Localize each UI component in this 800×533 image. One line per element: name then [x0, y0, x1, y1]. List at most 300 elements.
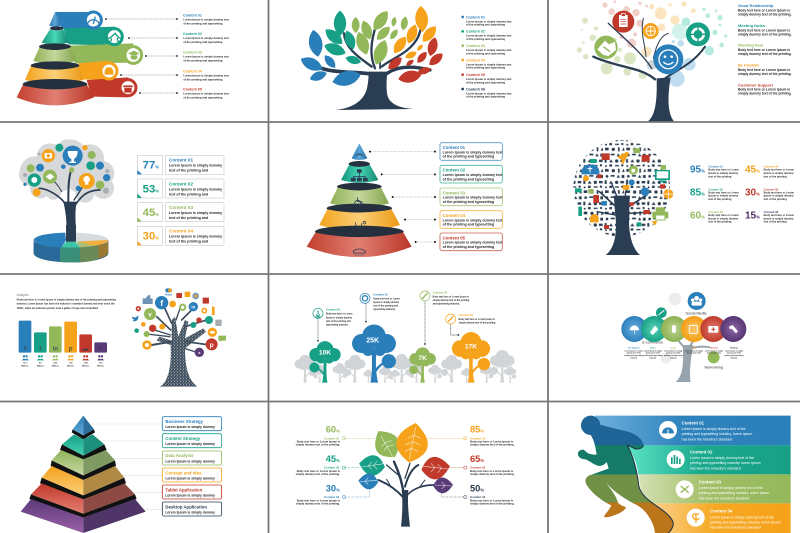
cone tiers — [307, 143, 412, 257]
circle captions: dummy text of the — [627, 352, 641, 355]
six main circles — [621, 316, 746, 342]
coloured icons — [575, 148, 673, 229]
cone ribbon icons — [85, 12, 142, 96]
callout 01: Ipsum is simply dummy — [326, 317, 353, 319]
label box: Content Strategy — [162, 434, 222, 448]
bar legend: people icons and values: Millions — [37, 366, 44, 368]
label box: Tablet Application: Tablet Application — [165, 487, 203, 492]
label box: Business Strategy: Lorem Ipsum is simply dummy — [165, 425, 215, 429]
panel: social media circle tree — [621, 292, 746, 382]
bar legend: people icons and values: Millions — [21, 366, 29, 368]
circle captions: Audio — [671, 347, 677, 350]
analysis text: industry. Lorem Ipsum has been the industry's standard dummy text ever since the — [17, 303, 115, 306]
circle captions: printing and typesetting — [725, 354, 743, 357]
circle captions: dummy text of the — [687, 352, 701, 355]
callout 03 — [420, 290, 470, 345]
panel: forest statistics — [295, 290, 516, 383]
bar legend: people icons and values: Millions — [67, 366, 74, 368]
cone content list — [183, 13, 229, 100]
cone tier icons — [351, 154, 367, 255]
stat 85 — [464, 425, 515, 447]
content box 01 — [440, 143, 503, 160]
content box 04 — [440, 211, 503, 228]
band 01 content: printing and typesetting industry. lorem Ipsum — [682, 432, 752, 436]
tree 10K: 10K — [319, 350, 331, 357]
content box 02: Lorem Ipsum is simply dummy text — [443, 173, 503, 177]
callout 03: and typesetting industry. — [433, 303, 460, 306]
speckled tree — [147, 305, 210, 387]
panel: bubble tree — [577, 0, 792, 122]
bubble tree text list: simply dummy text of the printing. — [738, 13, 792, 17]
bubble tree text list: simply dummy text of the printing. — [738, 92, 792, 96]
cone content list: Content 04 — [183, 69, 203, 73]
bar chart: in — [53, 346, 58, 352]
cone content list: Lorem Ipsum is simply dummy text — [183, 17, 229, 21]
stat 60: 60% — [690, 210, 705, 221]
crown of small icons — [573, 140, 670, 237]
tree 7K: 7K — [418, 355, 427, 362]
leaves: red — [386, 36, 445, 85]
band 01 content — [659, 420, 752, 441]
stat 85: Ipsum is simply dummy — [708, 194, 739, 198]
band 03 content: printing and typesetting industry. lorem Ipsum — [699, 491, 769, 495]
pie chart base — [34, 233, 108, 262]
stat 30: Ipsum is simply dummy — [764, 194, 794, 198]
stat 60: Ipsum is simply dummy — [708, 216, 739, 220]
content box 03: of the printing and typesetting — [443, 200, 494, 204]
social icon bubbles: s — [198, 350, 201, 355]
cone leader lines — [105, 18, 178, 94]
band 03 content — [676, 479, 769, 500]
callout 03: Content 03 — [433, 290, 448, 294]
pale circles — [661, 293, 681, 364]
stat 85: 85% — [690, 188, 705, 199]
social icon bubbles: flickr — [165, 293, 173, 297]
leaf tree content list: Lorem Ipsum is simply dummy text — [466, 48, 512, 52]
callout 04: Content 04 — [459, 313, 474, 317]
panel: runner with content bands — [578, 416, 791, 533]
band 04 content: Content 04 — [710, 508, 733, 513]
panel: colourful leaf tree — [298, 5, 512, 110]
tree trunk — [597, 180, 648, 255]
leaves: orange — [390, 5, 439, 60]
content box 02: Content 02 — [443, 168, 466, 173]
content box 03: Content 03 — [443, 190, 466, 195]
label box: Tablet Application — [162, 485, 222, 499]
analysis text: Analysis — [17, 293, 29, 297]
tree trunk and branches — [322, 20, 430, 110]
stat 85: Body text here or Lorem Ipsum is — [470, 440, 514, 444]
callout 04 — [446, 313, 496, 336]
content box 05 — [440, 233, 503, 251]
stat 65: Content 01 — [470, 466, 486, 470]
label box: Business Strategy: Business Strategy — [165, 419, 204, 424]
cone content list: Lorem Ipsum is simply dummy text — [183, 55, 229, 59]
content box 04: Lorem Ipsum is simply dummy text — [443, 218, 503, 222]
bubble tree text list: Good Relationship — [738, 3, 774, 8]
circle captions: Home — [650, 348, 657, 350]
circle captions: industry. — [670, 356, 677, 359]
stat 45: simply dummy text of the printing. — [296, 472, 340, 476]
circle captions: printing and typesetting — [664, 354, 683, 357]
band 02 content — [667, 449, 761, 470]
icon: balance bubble — [643, 23, 659, 39]
leader lines — [344, 438, 465, 497]
leaf tree content list: Lorem Ipsum is simply dummy text — [466, 34, 512, 38]
content box 05: Lorem Ipsum is simply dummy text — [443, 241, 503, 245]
stat 60: 60% — [326, 425, 340, 435]
bubble tree text list: Working Fast — [738, 43, 764, 48]
cone content list: of the printing and typesetting — [183, 21, 223, 25]
bubble tree text list: Body text here or Lorem Ipsum is — [738, 28, 790, 32]
leaf tree content list: Content 01 — [466, 15, 485, 19]
bar legend: people icons and values: 1.35 — [69, 363, 73, 365]
stat 45: Content 04 — [764, 165, 779, 169]
content box 03 — [440, 188, 503, 206]
circle captions: dummy text of the — [727, 352, 741, 355]
bubble tree text list: simply dummy text of the printing. — [738, 72, 792, 76]
bubble tree text list: simply dummy text of the printing. — [738, 52, 792, 56]
cone content list: Content 05 — [183, 88, 202, 92]
bar legend: people icons and values: 2.75 — [99, 363, 103, 365]
cone content list: Content 01 — [183, 13, 202, 17]
stat 45: Body text here or Lorem Ipsum is — [297, 469, 340, 473]
tree trunk and branches — [378, 462, 433, 527]
stat 85: 85% — [470, 425, 484, 435]
panel: six leaf tree with percentages — [296, 420, 515, 527]
band 02 content: has been the industry's standard — [690, 466, 741, 470]
tree 10K — [309, 341, 341, 383]
callout 02: typesetting industry. — [373, 308, 396, 311]
percentage box 53: text of the printing and — [169, 192, 208, 196]
band 01 content: Content 01 — [682, 420, 705, 425]
circle captions: Lorem Ipsum is simply — [664, 350, 682, 352]
percentage box 77: 77% — [143, 160, 159, 172]
stat 30: Body text here or Lorem Ipsum is — [297, 498, 340, 502]
stat 65: 65% — [470, 454, 484, 464]
content box 01: Content 01 — [443, 145, 466, 150]
percentage box 45: text of the printing and — [169, 216, 208, 220]
bar legend: people icons and values: Millions — [97, 366, 104, 368]
stat 85: text of the printing — [708, 197, 732, 201]
bubble tree text list: Body text here or Lorem Ipsum is — [738, 48, 790, 52]
circle captions: Medical — [710, 348, 718, 350]
stat 85: simply dummy text of the printing. — [470, 443, 515, 447]
cone content list: of the printing and typesetting — [183, 77, 223, 81]
tree trunk and branches — [39, 168, 100, 241]
icon: handshake bubble — [594, 36, 618, 59]
content box 01: Lorem Ipsum is simply dummy text — [443, 150, 503, 154]
callout 02: Content 02 — [373, 293, 388, 297]
stat 65: Body text here or Lorem Ipsum is — [470, 469, 514, 473]
callout 01: text of the printing and — [326, 320, 351, 323]
stat 30: Content 05 — [764, 187, 779, 191]
stat 45 — [296, 454, 346, 476]
leader lines — [91, 424, 162, 509]
stat 15: Ipsum is simply dummy — [764, 216, 794, 220]
leaf tree content list: of the printing and typesetting — [466, 23, 505, 27]
circle captions: Lorem Ipsum is simply — [625, 350, 643, 352]
social icon bubbles: p — [210, 342, 214, 349]
leaf tree content list: Lorem Ipsum is simply dummy text — [466, 19, 512, 23]
circle captions: printing and typesetting — [644, 354, 662, 357]
tree trunk and branches — [593, 18, 705, 122]
analysis text: Body text here or Lorem Ipsum is simply dummy text of the printing and typesetting — [17, 298, 116, 301]
stat 85 — [690, 187, 739, 201]
leaf tree content list: Lorem Ipsum is simply dummy text — [466, 91, 512, 95]
grey tree — [676, 340, 710, 382]
panel: 3D layered pyramid — [21, 416, 222, 533]
bubble tree text list: simply dummy text of the printing. — [738, 32, 792, 36]
icon: lifebuoy bubble — [686, 22, 710, 46]
percentage box 45: Lorem Ipsum is simply dummy — [169, 211, 222, 215]
circle captions: Life Support — [628, 347, 640, 350]
stat 30: 30% — [745, 188, 760, 199]
leaves — [358, 420, 453, 494]
stat 30: text of the printing — [764, 197, 787, 201]
circle captions: Lorem Ipsum is simply — [685, 350, 703, 352]
bar legend: people icons and values: Millions — [52, 366, 59, 368]
label box: Data Analysis — [162, 451, 222, 465]
panel: tree on pie base with percentages — [19, 139, 224, 262]
label box: Concept and Idea — [162, 468, 222, 482]
bar chart: v — [99, 346, 103, 352]
band 04 content: printing and typesetting industry. lorem Ipsum — [710, 520, 781, 524]
tree 25K: 25K — [366, 338, 379, 345]
leaves: green — [352, 8, 409, 67]
label box: Data Analysis: Lorem Ipsum is simply dummy — [165, 459, 215, 463]
stat 15 — [745, 210, 795, 224]
leaves: blue — [298, 29, 363, 89]
bar chart: t — [39, 346, 41, 352]
panel: social analysis bars and tree — [17, 288, 226, 387]
stat 45: 45% — [326, 454, 340, 464]
callout 03: Body text here or Lorem Ipsum is — [433, 295, 470, 298]
tree 17K: 17K — [465, 344, 477, 351]
callout 04: Body text here or Lorem Ipsum is — [459, 318, 496, 321]
stat 50: Content 01 — [470, 495, 486, 499]
cone leader lines — [369, 151, 436, 243]
stat 60: Body text here or Lorem Ipsum is — [297, 440, 340, 444]
label box: Concept and Idea: Concept and Idea — [165, 470, 202, 475]
stat 60: Content 03 — [708, 210, 723, 214]
bar legend: people icons and values: Millions — [82, 366, 89, 368]
stat 50: simply dummy text of the printing. — [470, 501, 515, 505]
leaf tree content list: of the printing and typesetting — [466, 37, 505, 41]
runner back outline — [627, 445, 673, 533]
content box 01: of the printing and typesetting — [443, 155, 494, 159]
cone content list: Content 03 — [183, 51, 202, 55]
callout 02: Body text here or Lorem — [373, 298, 400, 301]
analysis text: 1500s, when an unknown printer took a galley of type and scrambled — [17, 307, 98, 310]
band 02 content: Content 02 — [690, 449, 713, 454]
pale bubbles — [577, 0, 727, 87]
circle captions: Lorem Ipsum is simply — [705, 350, 723, 352]
circle captions: Lorem Ipsum is simply — [725, 350, 743, 352]
e-commerce node: E-commerce — [642, 340, 663, 344]
stat 15: text of the printing — [764, 220, 787, 224]
content box 03: Lorem Ipsum is simply dummy text — [443, 196, 503, 200]
percentage box 45: 45% — [143, 207, 159, 219]
panel: cone pyramid with content list — [17, 12, 229, 105]
social icon bubbles: v — [148, 311, 152, 318]
grey forest — [295, 350, 516, 383]
social media node: Social Media — [686, 311, 707, 315]
circle captions: printing and typesetting — [624, 354, 643, 357]
leaf tree content list: Content 04 — [466, 58, 486, 62]
leaf tree content list: Lorem Ipsum is simply dummy text — [466, 62, 512, 66]
stat 45: Content 01 — [324, 466, 340, 470]
stat 60 — [296, 425, 346, 447]
bar legend: people icons and values — [21, 355, 104, 368]
stat 95 — [690, 165, 739, 178]
band 01 content: has been the industry's standard — [682, 437, 732, 441]
circle captions: Write — [692, 347, 697, 350]
content box 05: of the printing and typesetting — [443, 245, 494, 249]
stat 85: Body text here or Lorem — [708, 190, 739, 194]
percentage box 30: text of the printing and — [169, 240, 208, 244]
stat 65: simply dummy text of the printing. — [470, 472, 515, 476]
stat 50 — [464, 483, 515, 505]
content box 02 — [440, 165, 503, 183]
bar legend: people icons and values: 5.6 — [39, 363, 42, 365]
percentage box 30: 30% — [143, 231, 159, 243]
label box: Tablet Application: Lorem Ipsum is simply dummy — [165, 493, 215, 497]
stat 50: 50% — [470, 483, 484, 493]
circle captions: Lorem Ipsum is simply — [644, 350, 662, 352]
percentage box 30: Lorem Ipsum is simply dummy — [169, 235, 222, 239]
cone content list: of the printing and typesetting — [183, 59, 223, 63]
callout 04: simply dummy text of the printing — [459, 322, 496, 325]
cone content list: Lorem Ipsum is simply dummy text — [183, 36, 229, 40]
stat 30: 30% — [326, 483, 340, 493]
callout 03: simply dummy text of the printing — [433, 299, 470, 302]
bubble tree text list: Customer Support — [738, 82, 774, 87]
circle captions: industry. — [731, 356, 738, 359]
stat 60 — [690, 210, 739, 224]
bubble tree text list: Meeting Notes — [738, 23, 766, 28]
callout 02 — [360, 293, 400, 322]
percentage box 77: Lorem Ipsum is simply dummy — [169, 164, 222, 168]
social icon bubbles: f — [160, 298, 163, 308]
circle captions — [624, 347, 743, 359]
cone content list: of the printing and typesetting — [183, 96, 223, 100]
content box 04: of the printing and typesetting — [443, 223, 494, 227]
percentage box 77 — [137, 155, 224, 174]
percentage box 53 — [137, 179, 224, 198]
colour bands — [595, 416, 791, 533]
stat 45 — [745, 165, 795, 178]
bar chart: f — [24, 346, 26, 352]
leaf tree content list: of the printing and typesetting — [466, 66, 505, 70]
circle captions: dummy text of the — [707, 352, 721, 355]
band 04 content: has been the industry's standard — [710, 525, 761, 529]
label box: Data Analysis: Data Analysis — [165, 453, 194, 458]
percentage box 45 — [137, 203, 224, 222]
percentage box 53: 53% — [143, 183, 159, 195]
stat 15: 15% — [745, 210, 760, 221]
stat 95: 95% — [690, 165, 705, 176]
stat 45: text of the printing — [764, 174, 787, 178]
content box 04: Content 04 — [443, 213, 466, 218]
cone content list: Lorem Ipsum is simply dummy text — [183, 92, 229, 96]
leaves: teal — [322, 11, 362, 66]
percentage box 30: Content 04 — [169, 229, 193, 234]
stat 60: text of the printing — [708, 220, 732, 224]
leaf tree content list: Content 03 — [466, 44, 485, 48]
cone ribbons — [55, 12, 133, 97]
percentage box 45: Content 03 — [169, 205, 193, 210]
callout 01 — [313, 308, 353, 341]
grey crown cloud — [19, 139, 114, 203]
tree 7K — [409, 347, 436, 383]
networking node: Networking — [705, 365, 723, 369]
percentage box 30 — [137, 226, 224, 245]
bar legend: people icons and values: 12.1 — [23, 363, 28, 365]
bubble tree text list: Body text here or Lorem Ipsum is — [738, 88, 790, 92]
bar legend: people icons and values: 3.45 — [84, 362, 88, 365]
stat 30: Body text here or Lorem — [764, 190, 795, 194]
tree 17K — [452, 332, 490, 383]
trunk over base — [66, 225, 76, 242]
leaf tree content list: of the printing and typesetting — [466, 95, 505, 99]
leaf tree content list: Content 06 — [466, 87, 485, 91]
callout 02: text of the printing and — [373, 305, 399, 308]
band 04 content — [687, 508, 781, 529]
band 02 content: printing and typesetting industry. lorem Ipsum — [690, 461, 761, 465]
stat 65 — [464, 454, 515, 476]
leaf tree content list: Content 02 — [466, 30, 485, 34]
stat 30: simply dummy text of the printing. — [296, 501, 340, 505]
stat 30 — [296, 483, 346, 505]
bubble tree text list: Body text here or Lorem Ipsum is — [738, 68, 790, 72]
stat 95: Body text here or Lorem — [708, 168, 739, 172]
bar chart: ▬ — [83, 346, 89, 352]
band 04 content: Lorem Ipsum is simply dummy text of the — [710, 515, 774, 519]
callout 01: Content 01 — [326, 308, 341, 312]
band 03 content: has been the industry's standard — [699, 496, 749, 500]
leaf tree content list: of the printing and typesetting — [466, 51, 505, 55]
bar chart — [19, 321, 107, 353]
stat 15: Content 06 — [764, 210, 779, 214]
stat 95: Content 01 — [708, 165, 723, 169]
stat 60: Body text here or Lorem — [708, 213, 739, 217]
stat 45: Body text here or Lorem — [764, 168, 795, 172]
social icon bubbles — [132, 288, 226, 357]
runner silhouette — [578, 416, 673, 533]
cone content list: Content 02 — [183, 32, 202, 36]
tree 25K — [352, 325, 396, 383]
analysis text — [17, 293, 116, 310]
stat 45: 45% — [745, 165, 760, 176]
circle captions: dummy text of the — [666, 352, 681, 355]
stat 60: Content 01 — [324, 436, 340, 440]
leaf tree content list — [461, 15, 512, 99]
cone content list: of the printing and typesetting — [183, 40, 223, 44]
bubble tree text list — [738, 3, 792, 96]
stat 85: Content 02 — [708, 187, 723, 191]
percentage box 77: text of the printing and — [169, 169, 208, 173]
circle captions: industry. — [650, 356, 657, 359]
label box: Desktop Application: Lorem Ipsum is simply dummy — [165, 510, 215, 514]
icon bubbles — [23, 144, 110, 196]
leaf tree content list: Content 05 — [466, 73, 485, 77]
percentage box 53: Lorem Ipsum is simply dummy — [169, 187, 222, 191]
label box: Content Strategy: Content Strategy — [165, 436, 201, 441]
callout 01: Body text here or Lorem — [326, 313, 352, 316]
bubble tree text list: Body text here or Lorem Ipsum is — [738, 9, 790, 13]
content box 02: of the printing and typesetting — [443, 177, 494, 181]
